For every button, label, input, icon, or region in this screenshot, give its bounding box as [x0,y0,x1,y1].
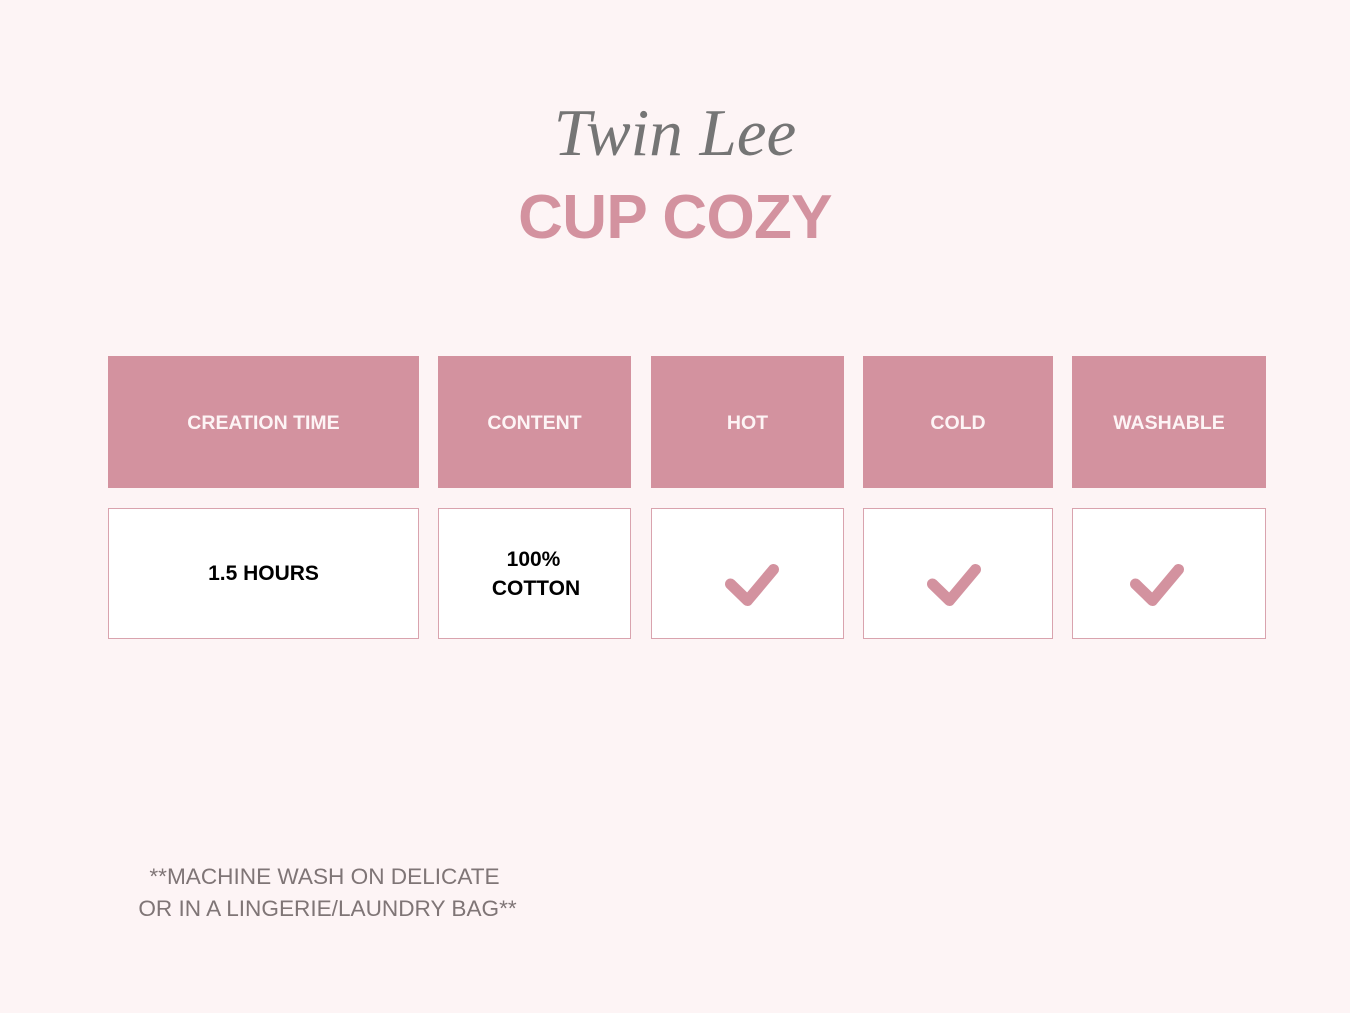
title: brand script: Twin Lee [554,96,796,170]
header: washable [1072,356,1266,488]
header: creation time: CREATION TIME [187,412,340,434]
header: cold [863,356,1053,488]
cell: creation time value [108,508,419,639]
cell: washable check [1072,508,1266,639]
cell: hot check [651,508,844,639]
header: hot [651,356,844,488]
title: product name: CUP COZY [518,183,832,252]
footnote: wash instructions: **MACHINE WASH ON DELICATE [149,864,500,889]
header: content: CONTENT [487,412,582,434]
header: hot: HOT [727,412,768,434]
icon: check mark hot [725,564,779,606]
header: content [438,356,631,488]
icon: check mark washable [1130,564,1184,606]
header: washable: WASHABLE [1113,412,1225,434]
header: cold: COLD [930,412,986,434]
footnote: wash instructions [138,864,517,921]
cell: content value: COTTON [492,576,580,600]
icon: check mark cold [927,564,981,606]
cell: content value [438,508,631,639]
cell: creation time value: 1.5 HOURS [208,562,319,584]
cell: cold check [863,508,1053,639]
footnote: wash instructions: OR IN A LINGERIE/LAUNDRY BAG** [138,896,517,921]
cell: content value: 100% [507,548,560,570]
header: creation time [108,356,419,488]
